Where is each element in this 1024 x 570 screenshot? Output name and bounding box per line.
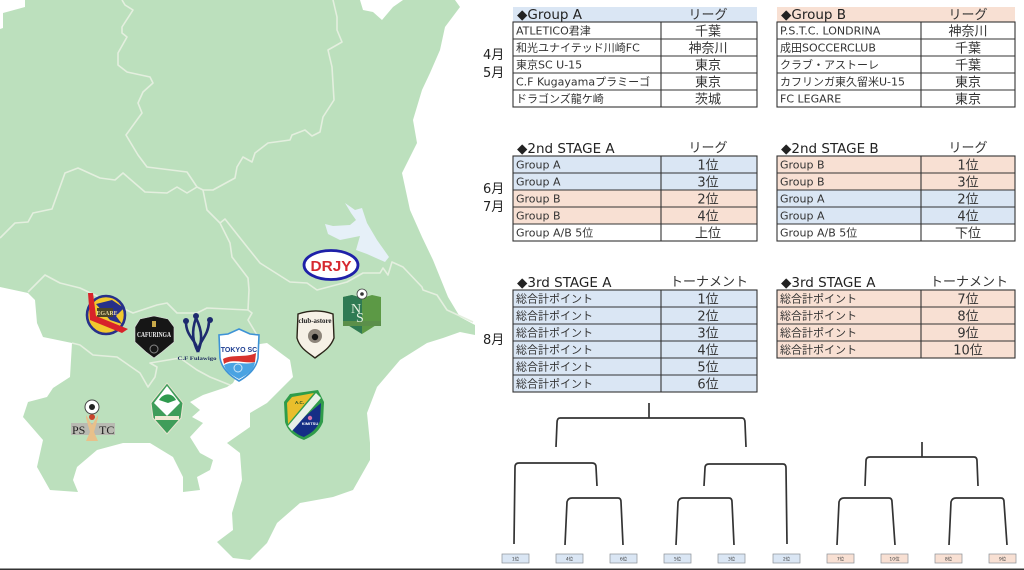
table: 2nd Stage B: 4位 [957, 210, 979, 224]
table: 3rd Stage A lower: 総合計ポイント [780, 342, 857, 356]
table: 3rd Stage A upper: ◆3rd STAGE A [517, 275, 612, 291]
seed boxes: upper places: 3位 [728, 556, 736, 562]
table: 3rd Stage A upper: 総合計ポイント [516, 292, 593, 306]
seed boxes: upper places: 2位 [783, 556, 791, 562]
seed boxes: lower places: 7位 [837, 556, 845, 562]
seed boxes: lower places: 9位 [999, 556, 1007, 562]
table: 3rd Stage A lower: 9位 [957, 326, 979, 342]
logo: C.F Fulawigo: C.F Fulawigo [178, 356, 217, 362]
table: 2nd Stage A: 1位 [697, 158, 719, 174]
table: 3rd Stage A upper: 総合計ポイント [516, 326, 593, 340]
table: 2nd Stage B: 下位 [955, 226, 981, 242]
lake Kasumigaura [325, 203, 389, 262]
table: 3rd Stage A lower: 総合計ポイント [780, 326, 857, 340]
logo: C.F Fulawigo [178, 313, 217, 362]
table: Group B: FC LEGARE [780, 92, 841, 106]
map of Kanto region [0, 0, 475, 560]
table: Group A [513, 7, 757, 108]
logo: PSTC trophy: PS [72, 423, 85, 437]
table: Group B: リーグ [948, 8, 988, 23]
table: Group A: C.F Kugayamaプラミーゴ [516, 74, 650, 88]
table: Group B: ◆Group B [781, 7, 846, 23]
table: 2nd Stage B: Group A [780, 210, 825, 222]
table: 2nd Stage A [513, 141, 757, 242]
logo: AC Kimitsu shield: A.C. [295, 400, 304, 405]
table: 3rd Stage A lower [777, 275, 1015, 358]
seed boxes: upper places: 1位 [512, 556, 520, 562]
table: Group A: 千葉 [695, 24, 721, 40]
table: Group A: ATLETICO君津 [516, 24, 591, 38]
logo: PSTC trophy [71, 400, 115, 441]
table: Group A: ドラゴンズ龍ケ崎 [516, 92, 604, 106]
second stage months: 6月 [483, 182, 504, 197]
seed boxes: lower places [827, 554, 1016, 563]
group stage months [483, 48, 504, 81]
table: 3rd Stage A upper: 4位 [697, 344, 719, 358]
table: Group B: 神奈川 [948, 24, 988, 40]
table: 2nd Stage B: 3位 [957, 176, 979, 190]
tournament bracket: upper places [514, 403, 787, 545]
table: 2nd Stage B: 1位 [957, 158, 979, 174]
logo: AC Kimitsu shield: KIMITSU [302, 421, 318, 426]
table: 2nd Stage B: Group A [780, 192, 825, 206]
table: 2nd Stage A: 4位 [697, 210, 719, 224]
table: 3rd Stage A lower: 総合計ポイント [780, 292, 857, 306]
table: 2nd Stage B: Group B [780, 158, 825, 172]
logo: Tokyo SC shield: TOKYO SC [221, 347, 257, 354]
table: 2nd Stage A: Group A/B 5位 [516, 226, 593, 240]
table: Group A: 東京 [695, 74, 721, 90]
land mass [0, 0, 475, 560]
table: Group A: 和光ユナイテッド川崎FC [516, 40, 640, 54]
logo: Legare crest [87, 293, 128, 334]
table: 2nd Stage B: ◆2nd STAGE B [781, 141, 879, 157]
logo: green diamond crest [151, 383, 183, 434]
table: 2nd Stage B: Group B [780, 176, 825, 188]
table: Group A: 東京SC U-15 [516, 58, 582, 72]
table: 2nd Stage A: 2位 [697, 192, 719, 208]
table: 3rd Stage A upper: 2位 [697, 310, 719, 324]
logo: Legare crest: LEGARE [92, 311, 118, 317]
logo: PSTC trophy: TC [99, 423, 114, 437]
seed boxes: upper places: 4位 [566, 556, 574, 562]
table: Group B: クラブ・アストーレ [780, 58, 879, 72]
table: Group B: カフリンガ東久留米U-15 [780, 76, 905, 88]
table: Group B: 東京 [955, 74, 981, 90]
table: 2nd Stage B [777, 141, 1015, 242]
group stage months: 4月 [483, 48, 504, 63]
table: Group A: 神奈川 [688, 42, 728, 56]
table: Group A: ◆Group A [517, 7, 583, 23]
seed boxes: lower places: 10位 [889, 556, 900, 562]
table: 3rd Stage A lower: 総合計ポイント [780, 308, 857, 322]
table: 3rd Stage A upper: トーナメント [670, 275, 748, 290]
table: 2nd Stage A: 上位 [695, 226, 721, 242]
table: 3rd Stage A lower: 8位 [957, 310, 979, 324]
table: 2nd Stage B: リーグ [948, 141, 988, 156]
second stage months [483, 182, 504, 215]
table: 2nd Stage A: リーグ [688, 141, 728, 156]
table: 2nd Stage B: 2位 [957, 192, 979, 208]
table: Group B: 千葉 [955, 42, 981, 56]
table: Group B: P.S.T.C. LONDRINA [780, 24, 881, 38]
third stage month: 8月 [483, 333, 504, 348]
bottom edge line [0, 568, 1024, 570]
table: Group A: 東京 [695, 58, 721, 74]
table: Group A: 茨城 [695, 92, 721, 108]
tournament bracket: lower places [837, 442, 1007, 545]
table: 3rd Stage A lower: ◆3rd STAGE A [781, 275, 876, 291]
logo: Cafuringa badge: CAFURINGA [137, 331, 171, 339]
seed boxes: upper places: 6位 [620, 556, 628, 562]
table: Group A: リーグ [688, 8, 728, 23]
table: Group B: 東京 [955, 92, 981, 108]
table: 3rd Stage A lower: 7位 [957, 292, 979, 308]
table: 2nd Stage A: Group B [516, 210, 561, 222]
table: 2nd Stage A: Group A [516, 158, 561, 172]
logo: NS green shield: N [351, 302, 361, 317]
table: 2nd Stage B: Group A/B 5位 [780, 226, 857, 240]
table: 3rd Stage A upper: 5位 [697, 360, 719, 376]
group stage months: 5月 [483, 66, 504, 81]
table: 3rd Stage A lower: 10位 [953, 344, 983, 358]
table: Group B: 千葉 [955, 58, 981, 74]
table: 2nd Stage A: 3位 [697, 176, 719, 190]
logo: Cafuringa badge [135, 316, 174, 358]
table: 2nd Stage A: Group A [516, 176, 561, 188]
table: 3rd Stage A upper: 総合計ポイント [516, 376, 593, 390]
seed boxes: upper places [502, 554, 800, 563]
logo: club-astore badge: club-astore [298, 317, 332, 325]
table: 3rd Stage A upper: 総合計ポイント [516, 360, 593, 374]
table: 3rd Stage A upper: 3位 [697, 326, 719, 342]
logo: DRJY oval [304, 250, 358, 280]
logo: AC Kimitsu shield [284, 390, 324, 440]
logo: club-astore badge [297, 311, 334, 358]
prefecture borders [0, 0, 473, 387]
second stage months: 7月 [483, 200, 504, 215]
table: 2nd Stage A: ◆2nd STAGE A [517, 141, 615, 157]
logo: DRJY oval: DRJY [310, 258, 352, 275]
table: 3rd Stage A lower: トーナメント [930, 275, 1008, 290]
table: 2nd Stage A: Group B [516, 192, 561, 206]
table: 3rd Stage A upper: 総合計ポイント [516, 342, 593, 356]
table: 3rd Stage A upper: 1位 [697, 292, 719, 308]
table: 3rd Stage A upper [513, 275, 757, 392]
table: Group B [777, 7, 1015, 108]
table: 3rd Stage A upper: 総合計ポイント [516, 308, 593, 322]
seed boxes: upper places: 5位 [674, 556, 682, 562]
table: Group B: 成田SOCCERCLUB [780, 42, 876, 54]
logo: Tokyo SC shield [219, 329, 259, 381]
table: 3rd Stage A upper: 6位 [697, 378, 719, 392]
seed boxes: lower places: 8位 [945, 556, 953, 562]
logo: NS green shield: S [356, 311, 364, 326]
logo: NS green shield [343, 289, 381, 334]
